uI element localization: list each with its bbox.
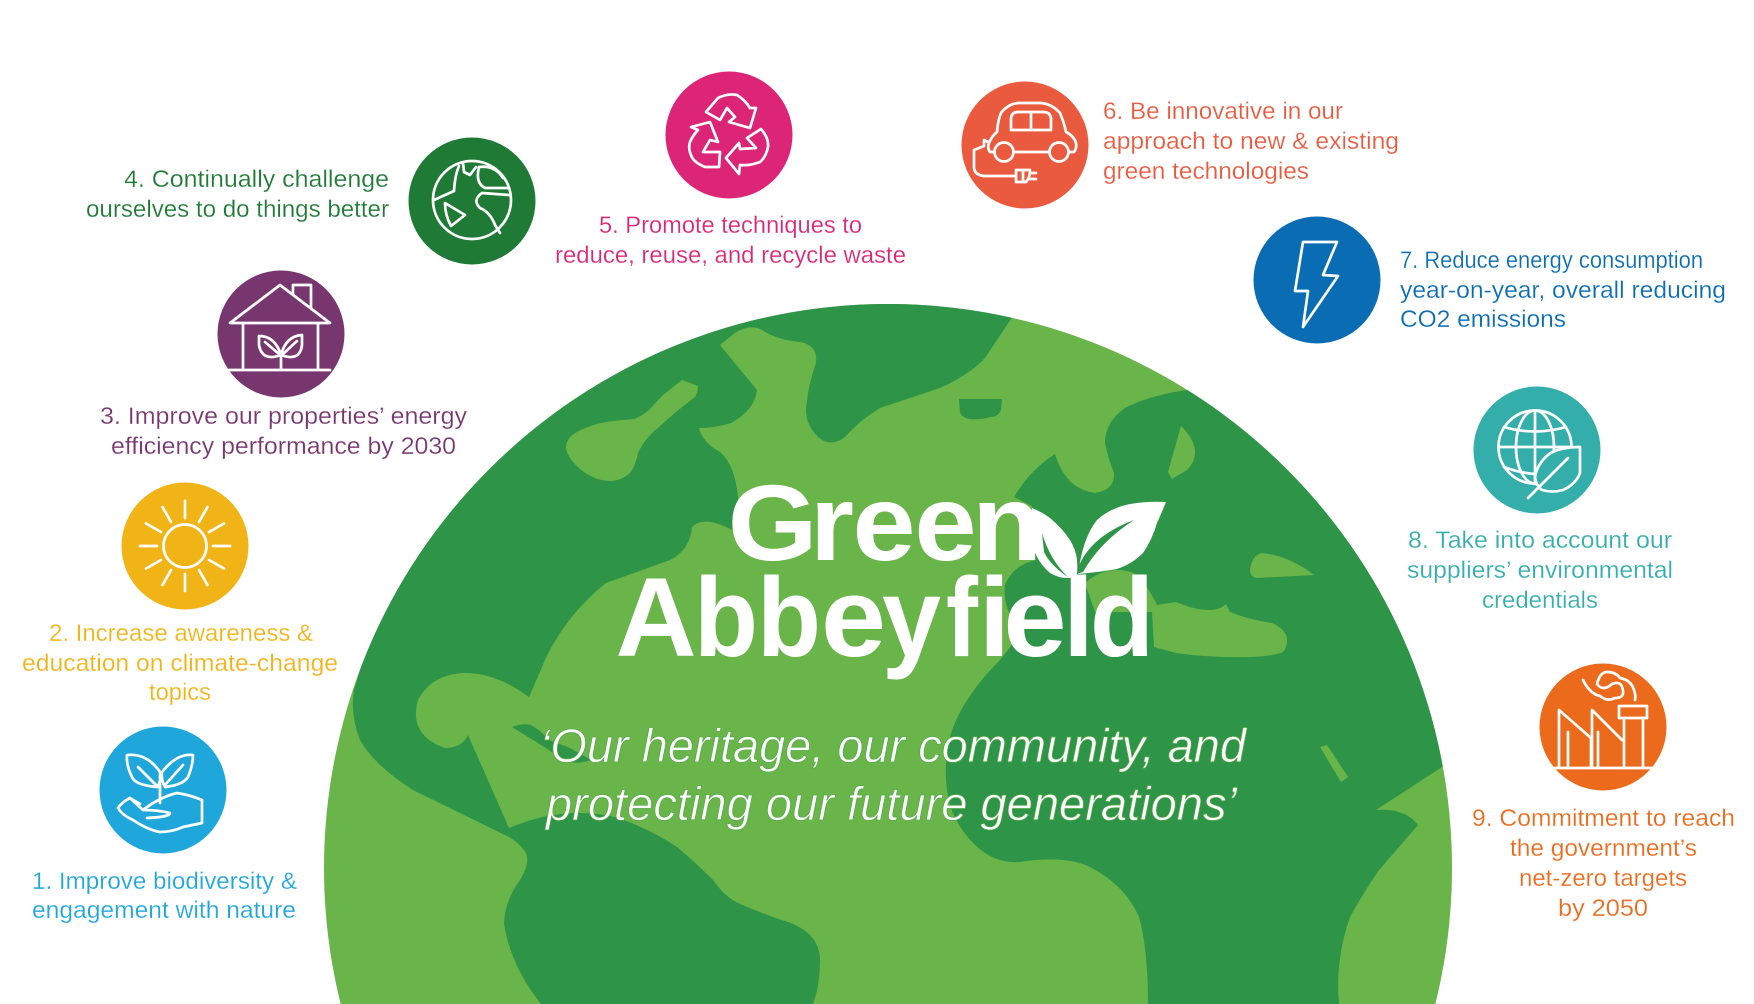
icon: sun <box>122 482 248 610</box>
item 1: biodiversity <box>32 726 297 924</box>
logo word Abbeyfield: i <box>979 555 1010 680</box>
item 2: awareness <box>22 482 338 706</box>
label 2: education on climate-change <box>22 650 338 677</box>
tagline: protecting our future generations’ <box>544 777 1239 830</box>
logo leaves <box>1031 502 1166 578</box>
logo word Green: n <box>972 462 1042 583</box>
island: central blob <box>1085 570 1287 657</box>
label 7: year-on-year, overall reducing <box>1400 277 1726 304</box>
logo word Green: e <box>852 462 916 583</box>
label 7: 7. Reduce energy consumption <box>1400 247 1703 274</box>
logo word Abbeyfield: b <box>694 555 758 680</box>
label 4: ourselves to do things better <box>86 196 389 223</box>
continent: left landmass <box>352 304 1012 1004</box>
continent: right landmass <box>946 390 1443 1004</box>
logo word Green: e <box>914 462 976 583</box>
logo word Abbeyfield: b <box>757 555 821 680</box>
logo word Abbeyfield: d <box>1090 555 1154 680</box>
logo word Green: r <box>810 462 854 583</box>
icon: lightning bolt <box>1254 216 1380 344</box>
item 9: net-zero <box>1472 664 1735 922</box>
globe illustration <box>324 304 1452 1004</box>
island: upper left <box>566 380 698 481</box>
island: triangle <box>1168 426 1195 479</box>
tagline: ‘Our heritage, our community, and <box>540 719 1248 772</box>
label 3: efficiency performance by 2030 <box>111 433 456 460</box>
label 3: 3. Improve our properties’ energy <box>100 403 467 430</box>
icon: factory with smoke <box>1540 664 1666 790</box>
label 8: 8. Take into account our <box>1408 527 1672 554</box>
island: right small <box>1250 553 1314 578</box>
label 9: by 2050 <box>1558 895 1648 922</box>
label 8: suppliers’ environmental <box>1407 557 1673 584</box>
label 6: green technologies <box>1103 158 1309 185</box>
logo: Green Abbeyfield <box>616 462 1166 680</box>
icon: globe with leaf <box>1474 386 1600 514</box>
icon: house with plant <box>218 270 344 398</box>
label 5: reduce, reuse, and recycle waste <box>555 242 906 269</box>
label 6: approach to new & existing <box>1103 128 1399 155</box>
label 9: the government’s <box>1510 835 1697 862</box>
logo word Abbeyfield: y <box>882 555 941 680</box>
label 9: net-zero targets <box>1519 865 1687 892</box>
logo word Abbeyfield: e <box>821 555 886 680</box>
label 1: 1. Improve biodiversity & <box>32 868 297 895</box>
lake: wedge <box>512 724 591 763</box>
icon: earth <box>408 138 536 264</box>
item 5: recycle <box>555 72 906 269</box>
logo word Green: G <box>728 462 818 583</box>
label 4: 4. Continually challenge <box>124 166 389 193</box>
label 7: CO2 emissions <box>1400 306 1566 333</box>
island: sliver <box>1320 745 1348 782</box>
lake: dark spot <box>959 399 1002 419</box>
logo word Abbeyfield: f <box>946 555 979 680</box>
item 7: energy <box>1254 216 1726 344</box>
icon: recycling arrows <box>666 72 792 198</box>
item 8: suppliers <box>1407 386 1673 614</box>
label 5: 5. Promote techniques to <box>599 212 862 239</box>
logo word Abbeyfield: l <box>1063 555 1094 680</box>
icon: electric car <box>962 82 1088 208</box>
label 6: 6. Be innovative in our <box>1103 98 1343 125</box>
icon: hand holding plant <box>100 726 226 854</box>
label 8: credentials <box>1482 587 1598 614</box>
label 2: 2. Increase awareness & <box>49 620 313 647</box>
item 6: green technologies <box>962 82 1399 208</box>
label 9: 9. Commitment to reach <box>1472 805 1735 832</box>
logo word Abbeyfield: e <box>1004 555 1066 680</box>
tagline <box>540 719 1248 830</box>
label 2: topics <box>149 679 211 706</box>
item 3: properties <box>100 270 467 460</box>
item 4: challenge <box>86 138 536 264</box>
label 1: engagement with nature <box>32 897 296 924</box>
logo word Abbeyfield: A <box>616 555 696 680</box>
